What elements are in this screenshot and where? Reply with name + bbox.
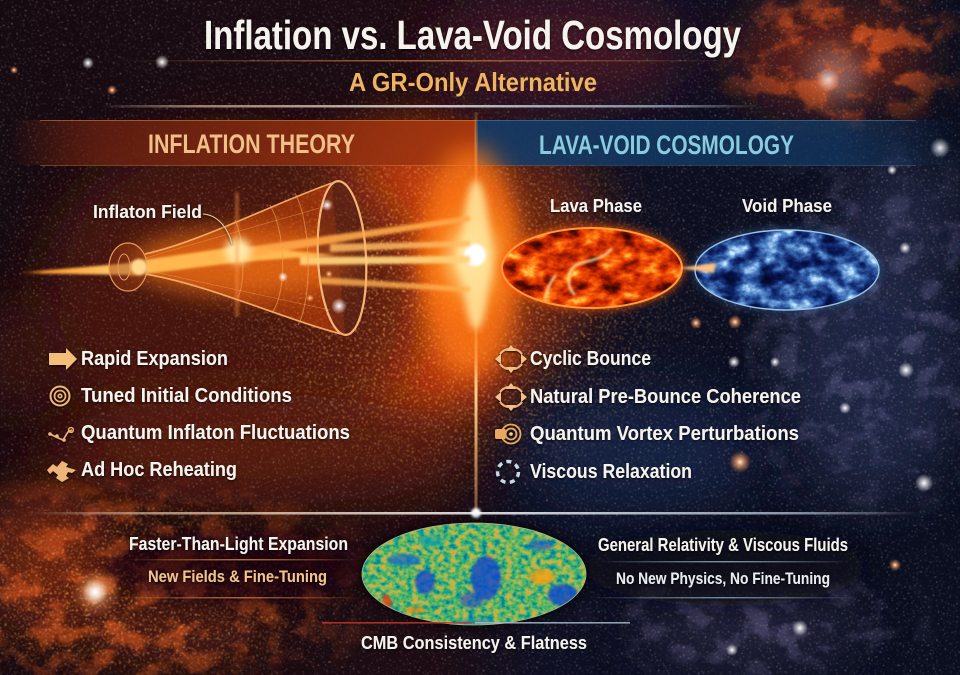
- bottom left claims: New Fields & Fine-Tuning: [148, 567, 327, 586]
- item: rapid expansion: Rapid Expansion: [81, 348, 228, 370]
- label: lava phase: Lava Phase: [550, 196, 642, 216]
- lower accent line: [322, 622, 630, 624]
- title divider: [115, 60, 735, 62]
- center divider with burst: [410, 112, 534, 512]
- panel: lava-void header: [476, 120, 960, 166]
- label: CMB consistency: CMB Consistency & Flatness: [361, 633, 587, 653]
- bottom left claims: [115, 534, 360, 598]
- item: cyclic bounce: Cyclic Bounce: [530, 348, 651, 370]
- cone outline: [145, 183, 345, 335]
- item: natural pre-bounce coherence: Natural Pre-Bounce Coherence: [530, 386, 801, 408]
- CMB map: [358, 519, 590, 629]
- item: quantum inflaton fluctuations: Quantum Inflaton Fluctuations: [81, 422, 350, 444]
- list: lava-void cosmology: [495, 345, 801, 483]
- seed bubble: [109, 243, 147, 291]
- subtitle divider: [100, 105, 760, 108]
- label: inflaton field: Inflaton Field: [93, 202, 202, 222]
- item: natural pre-bounce coherence: [495, 383, 801, 411]
- cone opening: [314, 180, 370, 336]
- inflation cone diagram: [15, 180, 470, 336]
- lava to void connector flare: [678, 263, 716, 273]
- item: cyclic bounce: [495, 345, 651, 373]
- lava phase: [499, 225, 686, 311]
- list: inflation theory: [47, 348, 350, 482]
- bottom right claims: General Relativity & Viscous Fluids: [598, 535, 848, 555]
- panel: inflation header: [10, 120, 476, 166]
- void phase: [692, 227, 882, 313]
- item: tuned initial conditions: Tuned Initial Conditions: [81, 385, 292, 407]
- panel: inflation header: INFLATION THEORY: [148, 129, 355, 159]
- bottom right claims: [590, 535, 855, 598]
- item: viscous relaxation: Viscous Relaxation: [530, 461, 692, 483]
- bottom divider: [30, 508, 920, 518]
- cone body: [145, 183, 345, 335]
- label: void phase: Void Phase: [742, 196, 832, 216]
- item: ad hoc reheating: Ad Hoc Reheating: [81, 459, 237, 481]
- item: quantum vortex perturbations: Quantum Vortex Perturbations: [530, 423, 799, 445]
- bottom right claims: No New Physics, No Fine-Tuning: [616, 569, 830, 588]
- title: Inflation vs. Lava-Void Cosmology: [204, 12, 741, 58]
- label: inflaton field: [93, 202, 232, 244]
- subtitle: A GR-Only Alternative: [349, 67, 597, 97]
- light beams: [15, 216, 470, 292]
- bottom left claims: Faster-Than-Light Expansion: [129, 534, 348, 554]
- panel: lava-void header: LAVA-VOID COSMOLOGY: [539, 130, 794, 160]
